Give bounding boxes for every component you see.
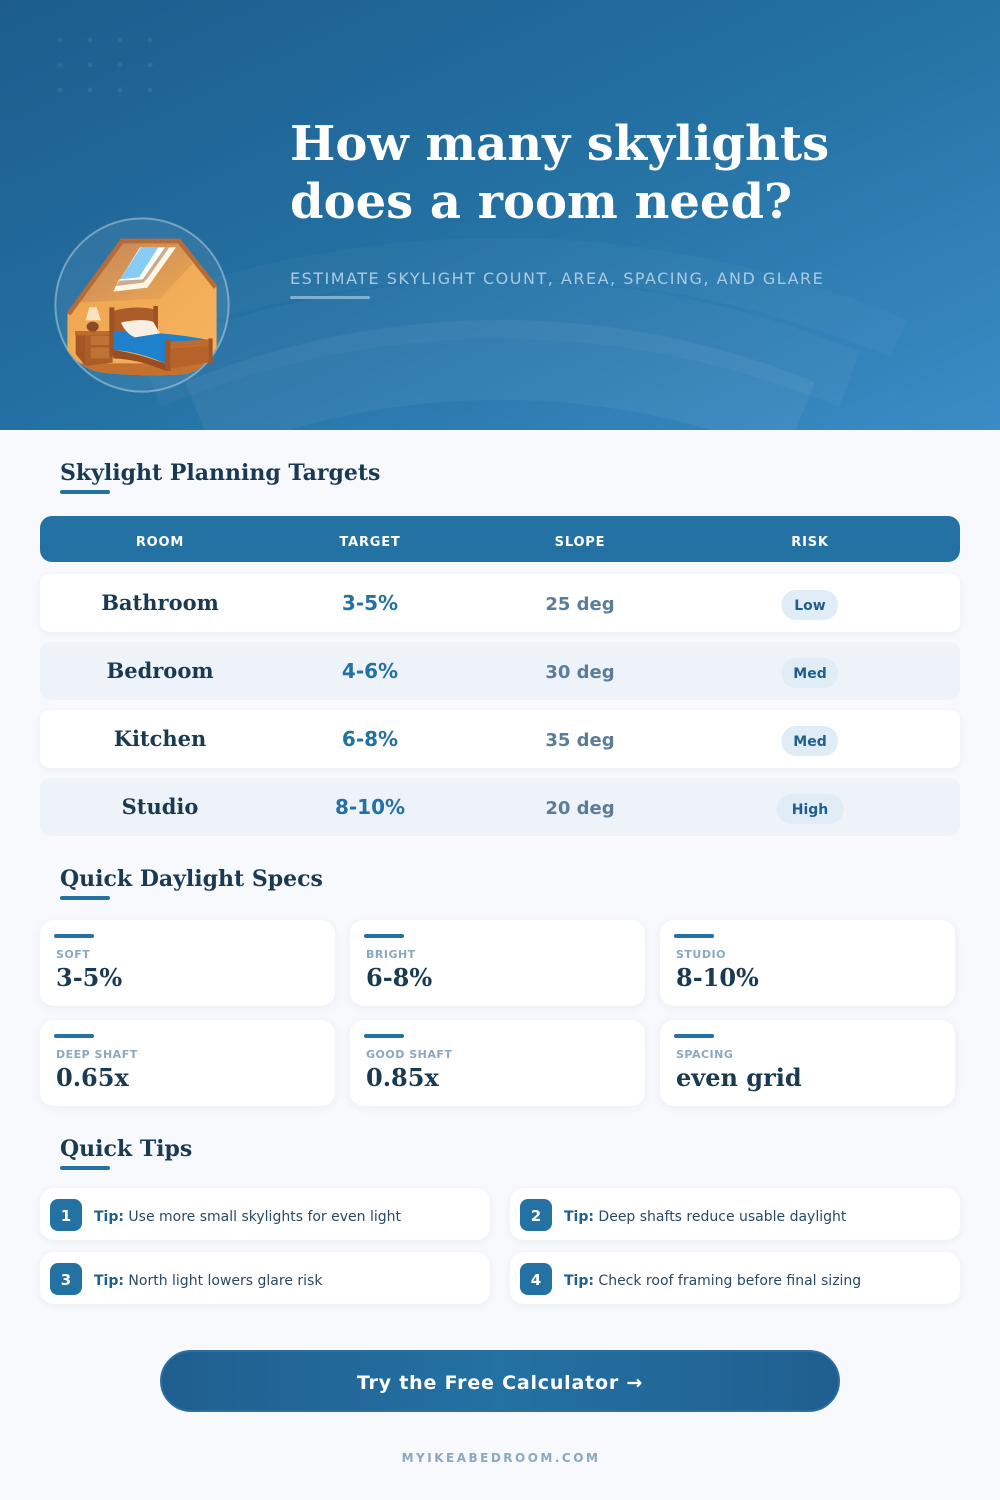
card: bright [350, 920, 645, 1006]
row: bedroom: Med [793, 666, 827, 682]
call to action button: Try the Free Calculator → [357, 1372, 643, 1394]
tip 4: Tip: Check roof framing before final sizing [564, 1273, 861, 1289]
tip 2 [510, 1188, 960, 1240]
card: good shaft: GOOD SHAFT [366, 1048, 452, 1061]
table header: ROOM [136, 535, 184, 550]
row: bathroom: Low [794, 598, 826, 614]
card: bright: 6-8% [366, 963, 432, 992]
card: deep shaft: DEEP SHAFT [56, 1048, 138, 1061]
row: kitchen: 35 deg [545, 730, 615, 751]
table header: SLOPE [555, 535, 605, 550]
heading: quick tips: Quick Tips [60, 1136, 192, 1162]
footer site name: MYIKEABEDROOM.COM [402, 1451, 600, 1465]
card: bright: BRIGHT [366, 948, 416, 961]
tip 1: Tip: Use more small skylights for even light [94, 1209, 401, 1225]
row: kitchen: Kitchen [114, 726, 206, 751]
tip 4 [510, 1252, 960, 1304]
row: bedroom: 4-6% [342, 659, 398, 683]
tip 2: 2 [531, 1207, 541, 1225]
icon: attic bedroom with skylight [54, 217, 230, 393]
lamp [86, 307, 101, 320]
heading: planning targets: Skylight Planning Targets [60, 460, 380, 486]
row: kitchen [40, 710, 960, 768]
subtitle: ESTIMATE SKYLIGHT COUNT, AREA, SPACING, AND GLARE [290, 269, 824, 288]
row: bathroom: 25 deg [545, 594, 615, 615]
table header [40, 516, 960, 562]
card: soft: 3-5% [56, 963, 122, 992]
table header: RISK [791, 535, 829, 550]
row: studio: Studio [122, 794, 198, 819]
tip 1: 1 [61, 1207, 71, 1225]
spec cards [54, 934, 802, 1092]
tip 4: 4 [531, 1271, 541, 1289]
row: bathroom: 3-5% [342, 591, 398, 615]
row: studio: 20 deg [545, 798, 615, 819]
card: good shaft: 0.85x [366, 1063, 439, 1092]
card: deep shaft [40, 1020, 335, 1106]
heading: daylight specs: Quick Daylight Specs [60, 866, 323, 892]
subtitle underline [290, 296, 370, 299]
tip 3 [40, 1252, 490, 1304]
card: spacing: even grid [676, 1063, 802, 1092]
header banner [0, 0, 1000, 430]
row: bedroom [40, 642, 960, 700]
nightstand [76, 333, 90, 365]
table [40, 516, 960, 836]
row: kitchen: Med [793, 734, 827, 750]
card: studio: STUDIO [676, 948, 726, 961]
table header: TARGET [339, 535, 401, 550]
title: does a room need? [290, 174, 792, 230]
card: soft: SOFT [56, 948, 90, 961]
row: studio: High [792, 802, 828, 818]
card: studio: 8-10% [676, 963, 759, 992]
row: kitchen: 6-8% [342, 727, 398, 751]
card: good shaft [350, 1020, 645, 1106]
tip 3: 3 [61, 1271, 71, 1289]
card: studio [660, 920, 955, 1006]
call to action button [160, 1350, 840, 1412]
row: bedroom: Bedroom [106, 658, 214, 683]
skylight [113, 247, 176, 292]
title: How many skylights [290, 116, 829, 172]
row: bedroom: 30 deg [545, 662, 615, 683]
card: spacing [660, 1020, 955, 1106]
row: studio [40, 778, 960, 836]
row: studio: 8-10% [335, 795, 405, 819]
title [290, 116, 829, 230]
card: deep shaft: 0.65x [56, 1063, 129, 1092]
tip 1 [40, 1188, 490, 1240]
bed [113, 308, 154, 333]
tip 2: Tip: Deep shafts reduce usable daylight [564, 1209, 846, 1225]
tip 3: Tip: North light lowers glare risk [94, 1273, 322, 1289]
card: spacing: SPACING [676, 1048, 733, 1061]
row: bathroom [40, 574, 960, 632]
row: bathroom: Bathroom [101, 590, 219, 615]
card: soft [40, 920, 335, 1006]
decorative skylight arcs and dots [58, 38, 815, 430]
tips [50, 1199, 942, 1304]
